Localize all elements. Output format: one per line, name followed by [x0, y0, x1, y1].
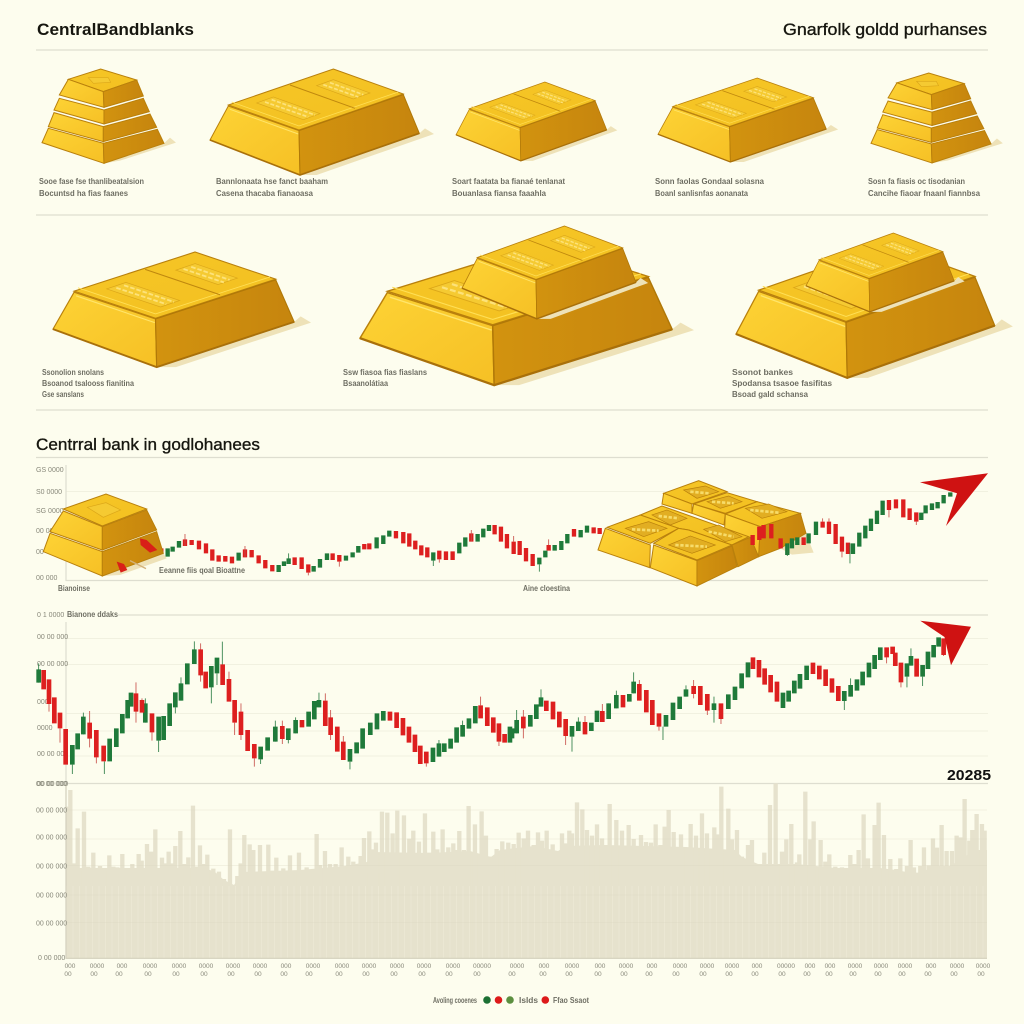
axis labels: main chart: 00 00 000 — [37, 781, 68, 788]
axis labels: volume x-axis: 00 — [172, 971, 180, 978]
axis labels: volume x-axis: 00 — [924, 971, 932, 978]
captions: middle row: Ssonot bankes — [732, 368, 794, 377]
axis labels: volume x-axis: 00 — [672, 971, 680, 978]
candles: main right — [512, 637, 944, 752]
axis labels: main chart: 00 00 000 — [37, 751, 68, 758]
axis labels: volume x-axis: 000 — [65, 963, 76, 970]
axis labels: volume x-axis: 0000 — [510, 963, 525, 970]
axis labels: top chart: SG 0000 — [36, 508, 64, 515]
captions: top row: Sosn fa fiasis oc tisodanian — [868, 177, 965, 186]
icon: gold bar 4 — [658, 78, 838, 162]
axis labels: top chart: 00 000 — [36, 528, 58, 535]
captions: top row: Sonn faolas Gondaal solasna — [655, 177, 765, 186]
axis labels: volume x-axis: 000 — [595, 963, 606, 970]
axis labels: volume x-axis: 00 — [725, 971, 733, 978]
axis labels: volume x-axis: 00 — [508, 971, 516, 978]
axis labels: volume y-axis: 00 00 000 — [36, 781, 67, 788]
axis labels: volume x-axis: 0000 — [725, 963, 740, 970]
axis labels: volume x-axis: 00 — [254, 971, 262, 978]
axis labels: volume x-axis: 0000 — [673, 963, 688, 970]
captions: middle row: Bsaanolátiaa — [343, 379, 388, 388]
axis labels: volume x-axis: 00000 — [777, 963, 795, 970]
text: axis caption left: Bianoinse — [58, 584, 90, 593]
axis labels: volume x-axis: 0000 — [172, 963, 187, 970]
panel: top row of gold bars — [39, 69, 1003, 198]
axis labels: main chart: 00 00 000 — [37, 661, 68, 668]
axis labels: top chart — [36, 467, 64, 582]
captions: top row: Bouanlasa fiansa faaahla — [452, 189, 547, 198]
legend — [433, 996, 589, 1005]
heading: left title: CentralBandblanks — [37, 20, 194, 39]
heading: right title: Gnarfolk goldd purhanses — [783, 20, 987, 39]
axis labels: top chart: GS 0000 — [36, 467, 64, 474]
axis labels: volume x-axis: 0000 — [898, 963, 913, 970]
candles: left run — [161, 525, 507, 575]
axis labels: volume x-axis: 000 — [825, 963, 836, 970]
axis labels: volume x-axis — [64, 963, 991, 978]
axis labels: volume y-axis: 00 00 000 — [36, 808, 67, 814]
axis labels: volume x-axis: 000 — [926, 963, 937, 970]
captions: middle row: Ssw fiasoa fias fiaslans — [343, 368, 428, 377]
text: chart caption: Eeanne fiis qoal Bioattne — [159, 566, 245, 575]
legend: Avoling cooenes — [433, 996, 477, 1005]
captions: top row: Sooe fase fse thanlibeatalsion — [39, 177, 144, 186]
axis labels: volume x-axis: 0000 — [950, 963, 965, 970]
axis labels: main chart: 00 00 000 — [37, 634, 68, 641]
axis labels: volume y-axis: 00 00 000 — [36, 864, 67, 870]
axis labels: volume x-axis: 000 — [281, 963, 292, 970]
legend: Islds — [519, 996, 539, 1005]
axis labels: top chart: 00 — [36, 549, 44, 556]
arrow: main chart up arrow — [920, 621, 971, 665]
captions: top row: Cancihe fiaoar fnaanl fiannbsa — [868, 189, 981, 198]
axis labels: volume x-axis: 00 — [645, 971, 653, 978]
axis labels: volume x-axis: 000 — [539, 963, 550, 970]
axis labels: volume x-axis: 00 — [473, 971, 481, 978]
icon: gold bar cluster — [598, 481, 814, 586]
axis labels: volume x-axis: 0000 — [874, 963, 889, 970]
axis labels: volume x-axis: 0000 — [848, 963, 863, 970]
axis labels: volume x-axis: 00 — [418, 971, 426, 978]
panel: middle row of gold bars — [42, 226, 1013, 399]
axis labels: volume x-axis: 00 — [115, 971, 123, 978]
captions: top row: Boanl sanlisnfas aonanata — [655, 189, 749, 198]
icon: stacked gold pyramid right — [871, 73, 1003, 163]
axis labels: main chart: 0 1 0000 — [37, 612, 64, 619]
chart: volume bars — [36, 781, 991, 978]
text: main chart legend label: Bianone ddaks — [67, 610, 118, 619]
axis labels: volume x-axis: 00 — [950, 971, 958, 978]
axis labels: volume x-axis: 0000 — [619, 963, 634, 970]
axis labels: volume x-axis: 000 — [117, 963, 128, 970]
axis labels: volume x-axis: 0000 — [976, 963, 991, 970]
chart: main candlesticks — [37, 610, 991, 788]
axis labels: volume x-axis: 0000 — [417, 963, 432, 970]
candles: main left — [39, 641, 510, 774]
axis labels: volume x-axis: 0000 — [335, 963, 350, 970]
axis labels: volume x-axis: 00 — [874, 971, 882, 978]
icon: gold bar 3 — [456, 82, 617, 161]
axis labels: volume x-axis: 00 — [305, 971, 313, 978]
captions: top row — [39, 177, 981, 198]
icon: gold bar stack centre — [360, 226, 694, 385]
axis labels: volume x-axis: 00 — [539, 971, 547, 978]
axis labels: volume x-axis: 0000 — [446, 963, 461, 970]
axis labels: volume x-axis: 0000 — [306, 963, 321, 970]
axis labels: volume x-axis: 0000 — [390, 963, 405, 970]
axis labels: volume y-axis: 00 00 000 — [36, 920, 67, 928]
icon: gold bar 2 — [210, 69, 434, 175]
axis labels: volume x-axis: 00 — [144, 971, 152, 978]
axis labels: volume x-axis: 000 — [647, 963, 658, 970]
axis labels: volume x-axis: 00 — [565, 971, 573, 978]
bars: volume left half — [69, 790, 508, 958]
axis labels: main chart: 000 — [37, 699, 49, 706]
axis labels: volume x-axis: 0000 — [565, 963, 580, 970]
axis labels: volume x-axis: 0000 — [253, 963, 268, 970]
icon: large gold bar — [53, 252, 311, 367]
axis labels: volume x-axis: 00 — [898, 971, 906, 978]
axis labels: volume x-axis: 0000 — [90, 963, 105, 970]
axis labels: volume x-axis: 00 — [362, 971, 370, 978]
axis labels: volume x-axis: 00 — [699, 971, 707, 978]
heading: chart section title: Centrral bank in godlohanees — [36, 435, 260, 454]
axis labels: volume x-axis: 00 — [90, 971, 98, 978]
captions: top row: Soart faatata ba fianaé tenlanat — [452, 177, 565, 186]
axis labels: volume x-axis: 00 — [620, 971, 628, 978]
chart: candlesticks with gold bars — [36, 465, 988, 593]
axis labels: volume x-axis: 00 — [64, 971, 72, 978]
axis labels: volume x-axis: 00 — [849, 971, 857, 978]
bars: volume right half — [514, 783, 985, 958]
axis labels: volume x-axis: 00000 — [473, 963, 491, 970]
text: axis caption mid: Aine cloestina — [523, 584, 570, 593]
candles: right run — [753, 492, 950, 563]
axis labels: volume y-axis: 0 00 000 — [38, 955, 65, 962]
captions: middle row: Gse sanslans — [42, 390, 84, 399]
axis labels: volume x-axis: 00 — [445, 971, 453, 978]
captions: middle row: Ssonolion snolans — [42, 368, 104, 377]
axis labels: volume x-axis: 00 — [390, 971, 398, 978]
axis labels: volume x-axis: 00 — [200, 971, 208, 978]
axis labels: volume y-axis — [36, 781, 67, 962]
axis labels: volume x-axis: 00 — [977, 971, 985, 978]
axis labels: volume x-axis: 00 — [778, 971, 786, 978]
axis labels: volume x-axis: 000 — [752, 963, 763, 970]
axis labels: main chart: 0000 — [37, 725, 53, 732]
captions: middle row: Spodansa tsasoe fasifitas — [732, 379, 833, 388]
axis labels: volume x-axis: 00 — [280, 971, 288, 978]
axis labels: volume x-axis: 00 — [803, 971, 811, 978]
axis labels: top chart: 00 000 — [36, 575, 58, 582]
icon: two-tier gold bar — [43, 494, 167, 576]
captions: top row: Casena thacaba fianaoasa — [216, 189, 314, 198]
axis labels: main chart — [37, 612, 68, 788]
axis labels: volume x-axis: 00 — [751, 971, 759, 978]
axis labels: volume x-axis: 00 — [335, 971, 343, 978]
axis labels: volume y-axis: 00 00 000 — [36, 892, 67, 900]
axis labels: volume x-axis: 00 — [594, 971, 602, 978]
captions: top row: Bocuntsd ha fias faanes — [39, 189, 129, 198]
axis labels: top chart: S0 0000 — [36, 489, 62, 496]
icon: stacked gold pyramid left — [42, 69, 176, 163]
axis labels: volume x-axis: 000 — [805, 963, 816, 970]
icon: gold bar stack right — [736, 233, 1013, 378]
axis labels: volume y-axis: 00 00 000 — [36, 834, 67, 842]
captions: middle row: Bsoad gald schansa — [732, 390, 809, 399]
axis labels: volume x-axis: 00 — [227, 971, 235, 978]
captions: middle row — [42, 368, 833, 399]
axis labels: volume x-axis: 00 — [825, 971, 833, 978]
axis labels: volume x-axis: 0000 — [199, 963, 214, 970]
axis labels: volume x-axis: 0000 — [362, 963, 377, 970]
axis labels: volume x-axis: 0000 — [143, 963, 158, 970]
captions: middle row: Bsoanod tsalooss fianitina — [42, 379, 134, 388]
arrow: top chart up arrow — [920, 473, 988, 526]
legend: Ffao Ssaot — [553, 996, 589, 1005]
text: year label: 20285 — [947, 767, 991, 784]
axis labels: volume x-axis: 0000 — [700, 963, 715, 970]
candles: middle run — [514, 526, 600, 572]
axis labels: volume x-axis: 0000 — [226, 963, 241, 970]
captions: top row: Bannlonaata hse fanct baaham — [216, 177, 328, 186]
